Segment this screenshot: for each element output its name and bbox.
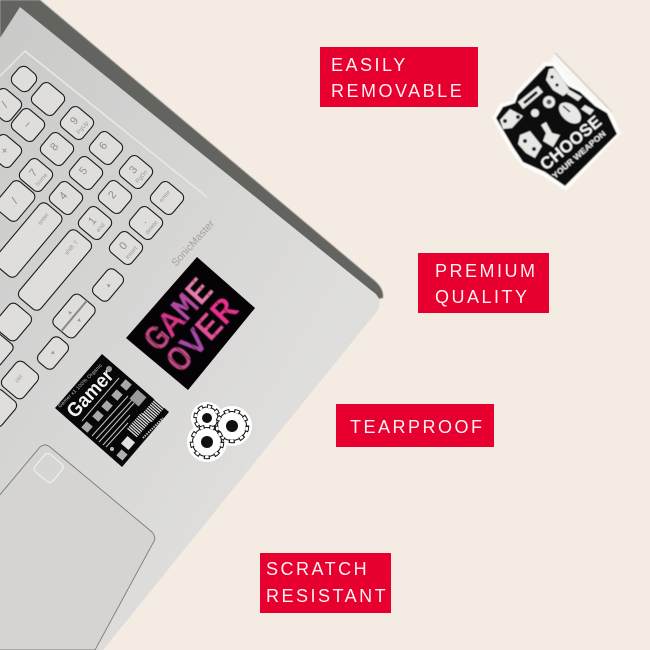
retro pad bbox=[518, 86, 543, 109]
gear small bbox=[196, 406, 218, 430]
game over text: OVER bbox=[160, 292, 247, 382]
keyboard keys: end bbox=[96, 222, 107, 234]
keyboard keys: 3 bbox=[127, 164, 140, 176]
keyboard keys: ctrl bbox=[14, 374, 24, 384]
choose text: CHOOSE bbox=[536, 112, 605, 174]
keyboard keys: delete bbox=[145, 219, 160, 236]
sticker: game over bbox=[126, 257, 255, 395]
game over text: GAME bbox=[138, 273, 222, 360]
keyboard keys: ▲ bbox=[105, 281, 113, 290]
label: easily removable bbox=[320, 47, 478, 107]
keyboard keys: PgUp bbox=[76, 120, 91, 136]
label: tearproof: TEARPROOF bbox=[350, 417, 485, 437]
keyboard keys: 1 bbox=[86, 215, 99, 227]
keyboard keys: / bbox=[9, 195, 21, 206]
peel sheet bbox=[550, 53, 612, 112]
gamer icons row bbox=[81, 379, 132, 433]
joystick bbox=[541, 122, 560, 147]
keyboard keys: 6 bbox=[97, 140, 110, 152]
mouse bbox=[555, 98, 585, 128]
controller top bbox=[546, 68, 570, 96]
your weapon text: YOUR WEAPON bbox=[550, 129, 608, 181]
keyboard keys: 9 bbox=[68, 115, 81, 127]
gamer barcode text bbox=[143, 418, 163, 438]
keyboard keys: ▼ bbox=[50, 349, 58, 358]
sticker black bbox=[496, 66, 617, 186]
keyboard keys bbox=[0, 64, 186, 429]
keyboard keys: insert bbox=[125, 245, 139, 261]
keyboard keys: 4 bbox=[57, 190, 70, 202]
touchpad bbox=[0, 445, 155, 650]
label: tearproof bbox=[336, 404, 494, 447]
gamer qr code bbox=[130, 390, 146, 406]
brand text: SonicMaster bbox=[169, 218, 217, 269]
controller bottom bbox=[518, 131, 542, 158]
gamer seal bbox=[106, 366, 112, 372]
keyboard keys: ▲ bbox=[66, 309, 74, 317]
sticker: gears bbox=[187, 402, 252, 462]
fingerprint reader bbox=[33, 452, 65, 484]
sticker outline bbox=[492, 62, 621, 191]
keyboard keys: . bbox=[138, 216, 149, 226]
keyboard keys: 2 bbox=[106, 189, 119, 201]
label: scratch resistant: SCRATCH bbox=[266, 559, 369, 579]
keyboard keys: − bbox=[21, 119, 35, 131]
gear right bbox=[217, 411, 247, 441]
keyboard keys: 0 bbox=[117, 240, 130, 252]
game over text bbox=[144, 276, 242, 382]
gamer divider lines bbox=[82, 378, 134, 447]
label: premium quality: QUALITY bbox=[435, 287, 530, 307]
gamer bottom icons bbox=[110, 436, 135, 461]
keyboard keys: ▼ bbox=[76, 317, 84, 325]
gamer small text: Gamer x1 100% Organic bbox=[57, 362, 104, 409]
keyboard keys: PgDn bbox=[135, 169, 149, 185]
label: easily removable: EASILY bbox=[331, 55, 408, 75]
laptop silver deck bbox=[0, 7, 380, 650]
controllers bbox=[500, 68, 594, 158]
label: scratch resistant bbox=[260, 553, 391, 613]
keyboard piece bbox=[567, 90, 594, 115]
keyboard keys: 7 bbox=[27, 167, 40, 179]
keyboard keys: 5 bbox=[77, 165, 90, 177]
keyboard keys: enter bbox=[159, 190, 172, 204]
keyboard keys: 8 bbox=[48, 141, 61, 153]
keyboard recess highlight bbox=[0, 51, 207, 197]
label: premium quality: PREMIUM bbox=[435, 261, 538, 281]
controller round pad bbox=[531, 96, 555, 117]
sticker: choose your weapon bbox=[492, 53, 621, 191]
controller left bbox=[500, 109, 523, 129]
gear bottom bbox=[192, 427, 222, 457]
keyboard keys: home bbox=[35, 172, 50, 188]
laptop dark edge bbox=[0, 0, 383, 300]
gamer barcode bbox=[132, 403, 160, 433]
gamer text: Gamer bbox=[63, 365, 118, 422]
keyboard keys: enter bbox=[37, 212, 51, 227]
label: easily removable: REMOVABLE bbox=[331, 81, 464, 101]
laptop bbox=[0, 0, 383, 650]
sticker: gamer label bbox=[55, 354, 169, 467]
label: scratch resistant: RESISTANT bbox=[266, 586, 388, 606]
label: premium quality bbox=[418, 253, 549, 313]
keyboard keys: shift ⇧ bbox=[63, 239, 80, 257]
